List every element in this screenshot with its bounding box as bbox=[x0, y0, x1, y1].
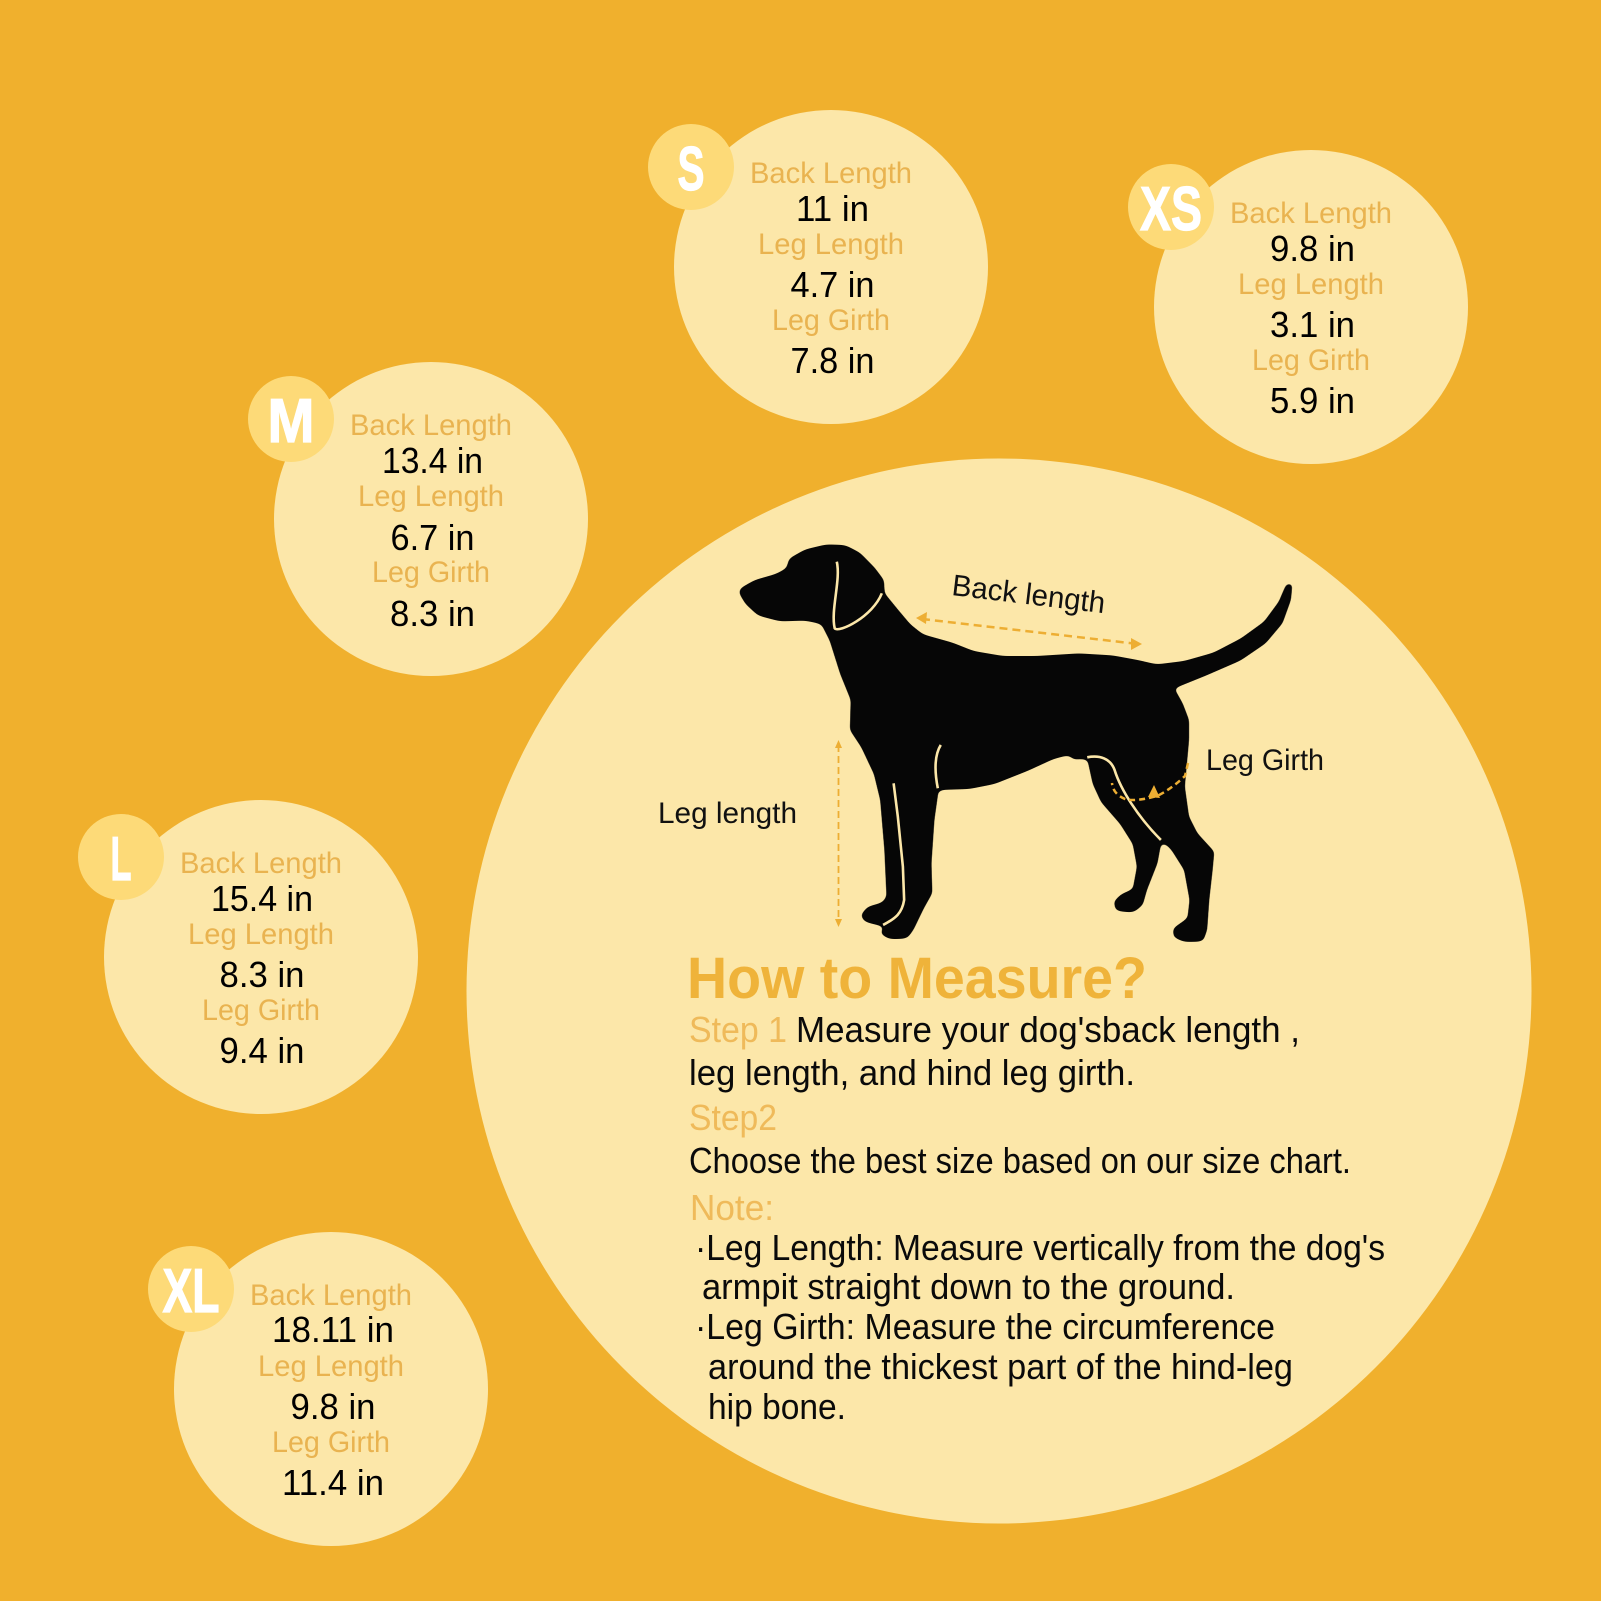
measurements: XS: Leg Girth bbox=[1252, 344, 1370, 377]
measurements: L: 8.3 in bbox=[220, 954, 304, 995]
measurements: S bbox=[750, 157, 912, 381]
badge: S bbox=[648, 124, 734, 210]
measurements: XL bbox=[250, 1279, 412, 1503]
measurements: XS: Leg Length bbox=[1238, 268, 1384, 301]
title: How to Measure? bbox=[687, 946, 1147, 1011]
note: Note: bbox=[690, 1187, 774, 1228]
note: hip bone. bbox=[708, 1386, 846, 1427]
badge: XL bbox=[148, 1246, 234, 1332]
measurements: S: 7.8 in bbox=[790, 340, 874, 381]
arrow: leg length bbox=[835, 740, 842, 927]
measurements: XL: 9.8 in bbox=[290, 1386, 376, 1427]
step 1: leg length, and hind leg girth. bbox=[689, 1052, 1135, 1093]
measurements: S: 11 in bbox=[796, 188, 869, 229]
measurements: XS: 3.1 in bbox=[1270, 304, 1355, 345]
badge: XL: XL bbox=[162, 1257, 220, 1326]
badge: L: L bbox=[110, 825, 132, 894]
measurements: L bbox=[180, 847, 342, 1071]
note: ·Leg Girth: Measure the circumference bbox=[695, 1306, 1275, 1347]
measurements: L: Back Length bbox=[180, 847, 342, 880]
measurements: S: Leg Girth bbox=[772, 304, 890, 337]
measurements: XL: Back Length bbox=[250, 1279, 412, 1312]
measurements: M: 6.7 in bbox=[390, 517, 474, 558]
measurements: XS: Back Length bbox=[1230, 197, 1392, 230]
note bbox=[690, 1187, 1385, 1427]
measurements: XL: 18.11 in bbox=[272, 1309, 394, 1350]
measurements: M bbox=[350, 409, 512, 634]
dog silhouette bbox=[739, 544, 1293, 942]
panel: size S bbox=[648, 110, 988, 424]
panel: size XL bbox=[148, 1232, 488, 1546]
arrow: back length bbox=[916, 612, 1142, 650]
step 1: Step 1 bbox=[689, 1009, 787, 1050]
badge: S: S bbox=[678, 135, 704, 204]
note: armpit straight down to the ground. bbox=[702, 1266, 1235, 1307]
dog diagram bbox=[658, 544, 1324, 942]
badge: M: M bbox=[268, 387, 314, 456]
measurements: L: 15.4 in bbox=[211, 878, 313, 919]
measurements: S: Back Length bbox=[750, 157, 912, 190]
step 2 bbox=[689, 1097, 1351, 1181]
measurements: L: 9.4 in bbox=[220, 1030, 304, 1071]
label: back length: Back length bbox=[950, 569, 1107, 620]
measurements: M: 13.4 in bbox=[382, 440, 483, 481]
measurements: L: Leg Length bbox=[188, 918, 334, 951]
instructions bbox=[689, 1009, 1385, 1427]
measurements: S: Leg Length bbox=[758, 228, 904, 261]
arrow: leg girth bbox=[1112, 763, 1188, 800]
measurements: XS: 9.8 in bbox=[1270, 228, 1355, 269]
badge: L bbox=[78, 814, 164, 900]
panel: size M bbox=[248, 362, 588, 676]
measurements: L: Leg Girth bbox=[202, 994, 320, 1027]
dog contour lines bbox=[834, 562, 1161, 925]
step 1: Measure your dog'sback length , bbox=[796, 1009, 1300, 1050]
panel: size L bbox=[78, 800, 418, 1114]
measurements: XL: 11.4 in bbox=[282, 1462, 384, 1503]
step 1 bbox=[689, 1009, 1300, 1093]
measurements: M: Leg Girth bbox=[372, 556, 490, 589]
measurements: M: 8.3 in bbox=[390, 593, 475, 634]
measurements: XL: Leg Length bbox=[258, 1350, 404, 1383]
badge: XS bbox=[1128, 164, 1214, 250]
step 2: Choose the best size based on our size chart. bbox=[689, 1140, 1351, 1181]
label: leg length: Leg length bbox=[658, 797, 797, 830]
measurements: XS bbox=[1230, 197, 1392, 421]
measurements: S: 4.7 in bbox=[790, 264, 874, 305]
measurements: M: Back Length bbox=[350, 409, 512, 442]
step 2: Step2 bbox=[689, 1097, 777, 1138]
badge: M bbox=[248, 376, 334, 462]
panel: size XS bbox=[1128, 150, 1468, 464]
panel: how to measure bbox=[466, 458, 1532, 1524]
measurements: XS: 5.9 in bbox=[1270, 380, 1355, 421]
badge: XS: XS bbox=[1140, 175, 1202, 244]
measurements: XL: Leg Girth bbox=[272, 1426, 390, 1459]
label: leg girth: Leg Girth bbox=[1206, 744, 1324, 777]
measurements: M: Leg Length bbox=[358, 480, 504, 513]
note: ·Leg Length: Measure vertically from the dog's bbox=[695, 1227, 1385, 1268]
note: around the thickest part of the hind-leg bbox=[708, 1346, 1293, 1387]
